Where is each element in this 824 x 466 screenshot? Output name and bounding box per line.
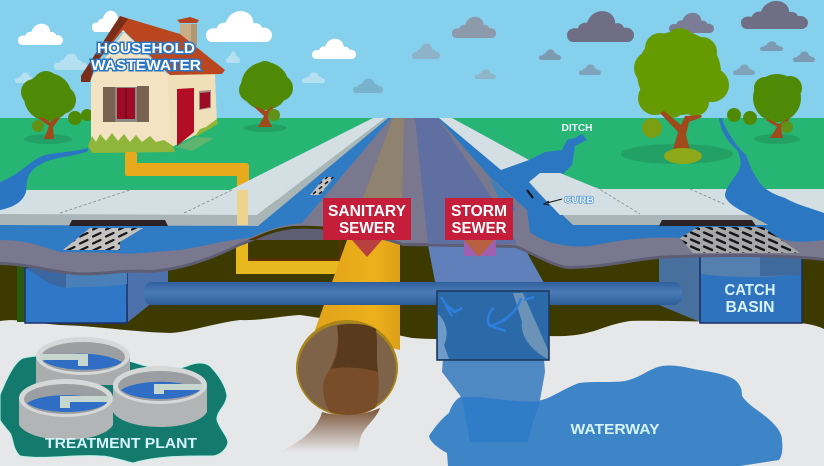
house: roof shadow (81, 16, 128, 82)
road storm stripe (415, 118, 517, 244)
house: door mat (176, 137, 214, 151)
waterway (429, 365, 782, 466)
plant: tank back (36, 337, 130, 385)
house: grass (88, 119, 218, 153)
grate upper left (310, 177, 334, 195)
waterway label: WATERWAY (570, 421, 660, 438)
catch basin label: BASIN (726, 299, 774, 316)
road sanitary stripe (363, 118, 404, 198)
sanitary sewer label (323, 198, 411, 257)
house: roof (81, 16, 225, 82)
ground front edge shadow (0, 229, 824, 275)
right gutter and ditch water (438, 118, 824, 246)
right catch basin (659, 255, 802, 323)
left stream (0, 148, 88, 210)
household wastewater label: HOUSEHOLD (97, 40, 195, 57)
right sidewalk lower (529, 173, 824, 225)
right sidewalk upper strip (439, 118, 529, 170)
storm pipe cut-away box (437, 291, 549, 360)
curb arrow (544, 199, 562, 205)
road surface (0, 118, 824, 272)
plant: tank right (113, 366, 207, 427)
tree: large (621, 28, 733, 164)
sanitary sewer label: SEWER (339, 220, 395, 237)
translucent pipe over sidewalk (237, 190, 248, 225)
curb inlet right (659, 220, 756, 226)
storm overflow fall (442, 358, 545, 442)
small sanitary lateral pipe (236, 238, 340, 274)
curb inlet left (69, 220, 168, 226)
catch basin label: CATCH (724, 282, 776, 299)
house: door (177, 88, 194, 146)
storm sewer label: SEWER (452, 220, 506, 237)
soil cross-section (0, 200, 824, 339)
left sidewalk (0, 118, 388, 226)
sky (0, 0, 824, 119)
storm clouds (353, 1, 815, 93)
sanitary sewer label: SANITARY (328, 203, 407, 220)
curb dark edge (527, 190, 533, 198)
storm sewer label: STORM (451, 203, 507, 220)
sewage outflow (280, 408, 380, 452)
plant: ground (0, 355, 228, 463)
tree: far left (21, 71, 93, 144)
sewage pipe opening (296, 320, 398, 416)
tree: far right (727, 74, 802, 144)
white clouds (18, 11, 356, 59)
household wastewater label (91, 40, 201, 74)
grate upper right (489, 178, 516, 212)
house: window (103, 86, 149, 122)
tree: left of road (239, 61, 293, 132)
house: side window (199, 90, 211, 110)
grate right (680, 227, 800, 253)
catch basin label (724, 282, 776, 316)
left catch basin (17, 266, 168, 323)
pale clouds (15, 51, 325, 83)
household wastewater label: WASTEWATER (91, 57, 201, 74)
house: chimney (177, 17, 199, 46)
right stream (719, 118, 824, 232)
storm sewer channel (427, 240, 549, 292)
house (81, 16, 225, 153)
left gutter water (0, 118, 391, 254)
curb label: CURB (564, 195, 595, 205)
grate left (63, 228, 143, 250)
sanitary sewer trunk (315, 240, 400, 350)
horizontal storm pipe (144, 282, 682, 305)
house: front wall (91, 32, 172, 152)
ditch label: DITCH (562, 123, 592, 134)
grass (0, 118, 824, 193)
treatment plant (0, 337, 228, 463)
fall over waterway (462, 397, 540, 442)
house: side wall (166, 74, 217, 147)
storm sewer label (445, 198, 513, 257)
plant: label: TREATMENT PLANT (45, 435, 197, 452)
yellow house pipe (125, 152, 249, 191)
plant: tank left (19, 379, 113, 440)
